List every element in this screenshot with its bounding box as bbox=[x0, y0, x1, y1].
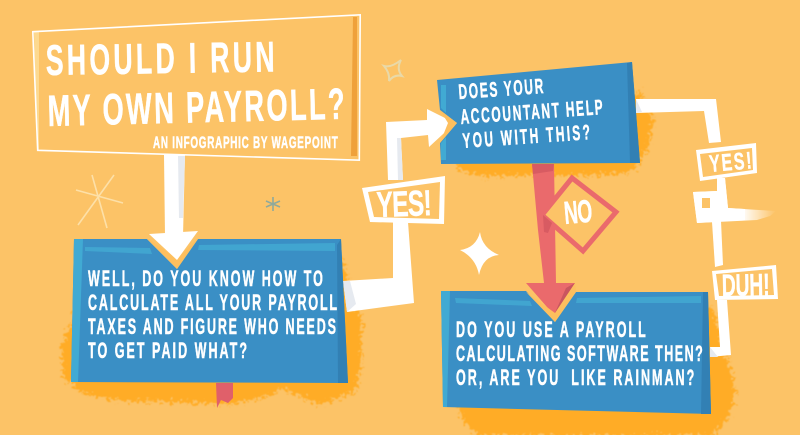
subtitle: AN INFOGRAPHIC BY WAGEPOINT bbox=[153, 133, 338, 152]
arrowhead: down to question one bbox=[149, 231, 198, 260]
label: no diamond bbox=[542, 178, 616, 251]
label: yes left: YES! bbox=[376, 182, 432, 225]
question text: DO YOU USE A PAYROLL bbox=[456, 317, 646, 342]
icon: outline star bbox=[384, 60, 402, 81]
label: yes right: YES! bbox=[708, 148, 753, 178]
ink splatter behind boxes bbox=[62, 90, 736, 435]
question text: YOU WITH THIS? bbox=[462, 121, 591, 153]
icon: large sparkle bbox=[460, 232, 499, 275]
question text bbox=[456, 317, 703, 390]
label: duh: DUH! bbox=[722, 269, 770, 303]
label: no diamond: NO bbox=[562, 193, 594, 231]
arrow: title to question one bbox=[164, 155, 185, 236]
icon: starburst bbox=[76, 175, 123, 228]
question text bbox=[458, 75, 603, 153]
label: duh bbox=[712, 265, 778, 303]
question text: TAXES AND FIGURE WHO NEEDS bbox=[88, 314, 336, 339]
label: yes right bbox=[696, 143, 757, 181]
question text: CALCULATING SOFTWARE THEN? bbox=[456, 341, 703, 366]
connector: right branch bbox=[636, 99, 776, 357]
question text bbox=[88, 266, 337, 363]
question text: CALCULATE ALL YOUR PAYROLL bbox=[88, 290, 337, 315]
question text: TO GET PAID WHAT? bbox=[88, 338, 247, 363]
connector: yes to accountant question bbox=[343, 109, 455, 312]
question text: DOES YOUR bbox=[458, 75, 544, 104]
stub: red post under box one bbox=[216, 383, 233, 408]
heading line 2: MY OWN PAYROLL? bbox=[47, 79, 345, 136]
sparkle: title star bbox=[303, 49, 323, 68]
panel: question two bbox=[437, 62, 640, 164]
panel: title sign bbox=[32, 14, 361, 161]
panel: question one bbox=[71, 239, 348, 383]
question text: OR, ARE YOU LIKE RAINMAN? bbox=[456, 365, 694, 390]
question text: WELL, DO YOU KNOW HOW TO bbox=[88, 266, 323, 291]
heading line 1: SHOULD I RUN bbox=[45, 33, 275, 85]
icon: asterisk bbox=[266, 197, 280, 211]
arrow: no red arrow bbox=[526, 164, 575, 315]
question text: ACCOUNTANT HELP bbox=[460, 96, 603, 129]
panel: question three bbox=[441, 283, 711, 414]
label: yes left bbox=[362, 176, 445, 225]
